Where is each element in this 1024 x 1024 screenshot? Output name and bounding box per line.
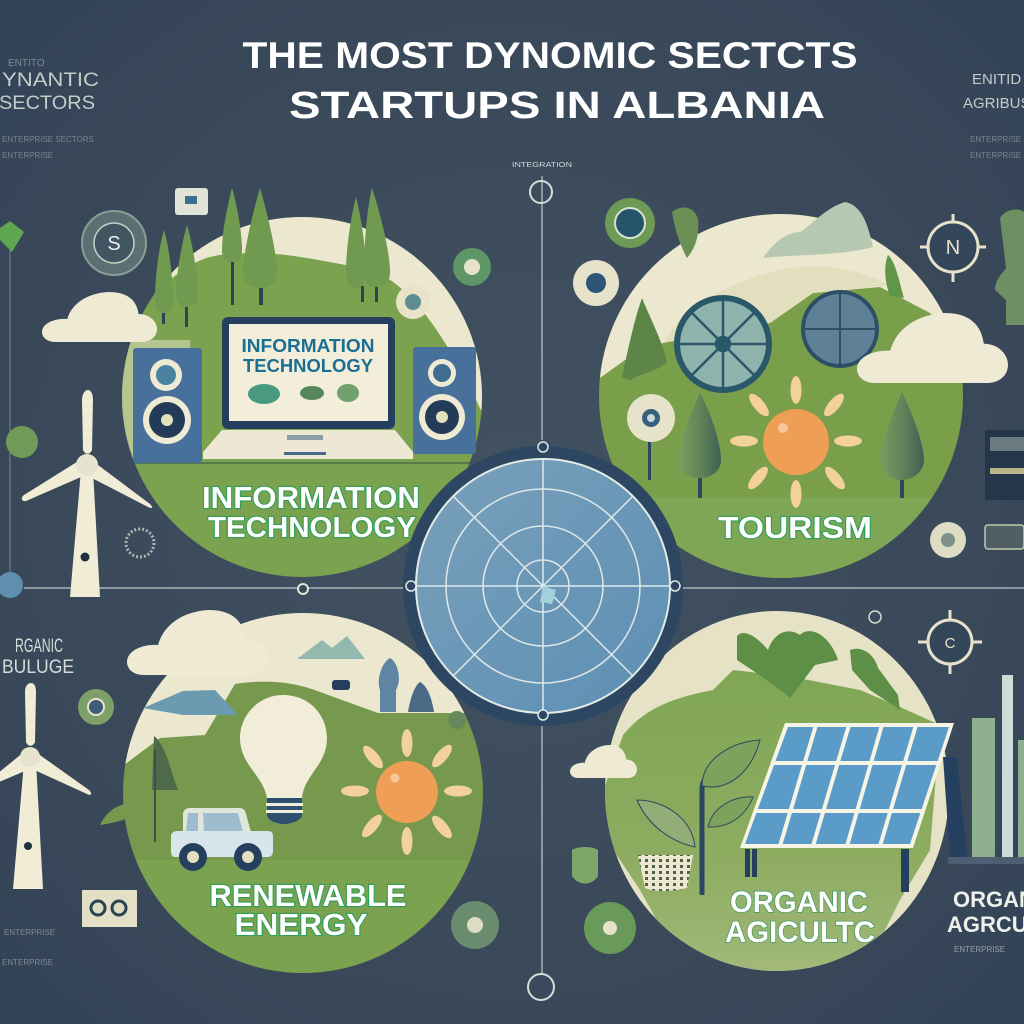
foliage xyxy=(737,631,900,710)
cloud xyxy=(570,745,637,778)
panel: organic agriculture xyxy=(570,611,967,980)
cloud xyxy=(42,292,157,342)
label xyxy=(725,886,875,949)
panel: renewable energy xyxy=(100,600,490,980)
radar chart xyxy=(403,442,683,726)
plant xyxy=(637,740,760,895)
right side label: ENTERPRISE xyxy=(970,151,1021,160)
cloud xyxy=(127,610,268,675)
label xyxy=(210,878,406,942)
laptop: TECHNOLOGY xyxy=(243,356,373,376)
trees xyxy=(679,392,924,498)
left side label: dynamic sectors: YNANTIC xyxy=(2,70,99,91)
wind turbine: upper xyxy=(22,390,152,597)
left side label: dynamic sectors xyxy=(0,58,99,160)
left side label: organic: RGANIC xyxy=(15,636,63,657)
left side label: organic xyxy=(2,636,74,967)
gear xyxy=(627,394,675,480)
bulb xyxy=(240,695,327,824)
label: INFORMATION xyxy=(202,480,420,515)
title: STARTUPS IN ALBANIA xyxy=(289,85,825,127)
label: ENERGY xyxy=(234,907,368,942)
panel: tourism xyxy=(590,200,1008,587)
wind turbine: lower xyxy=(0,683,91,889)
sun xyxy=(341,729,472,855)
right side label: organic agriculture xyxy=(947,887,1024,954)
label: AGICULTC xyxy=(725,916,875,949)
trees xyxy=(155,188,390,327)
sun xyxy=(730,376,862,508)
axis lines xyxy=(10,176,1024,975)
label: ORGANIC xyxy=(730,886,868,919)
title xyxy=(242,35,858,127)
wheel xyxy=(677,298,769,390)
laptop xyxy=(203,317,413,459)
label: TOURISM xyxy=(718,510,872,545)
mountain xyxy=(763,202,873,258)
right side label: ENTERPRISE xyxy=(970,135,1021,144)
solar panel xyxy=(740,723,967,892)
label xyxy=(202,480,420,544)
icon badges: S xyxy=(107,233,121,255)
hills and trees xyxy=(100,636,466,842)
car xyxy=(171,808,273,871)
label: RENEWABLE xyxy=(210,878,406,913)
left side label: organic: ENTERPRISE xyxy=(4,928,55,937)
panel: information technology xyxy=(42,188,490,577)
top axis label: INTEGRATION xyxy=(512,162,572,169)
left side label: organic: ENTERPRISE xyxy=(2,958,53,967)
tree left xyxy=(622,298,667,380)
bar graphic xyxy=(948,675,1024,864)
left side label: dynamic sectors: ENTITO xyxy=(8,58,45,69)
wheel xyxy=(803,292,877,366)
right side label: ENITID xyxy=(972,71,1021,88)
speaker left xyxy=(133,348,202,463)
left side label: dynamic sectors: ENTERPRISE SECTORS xyxy=(2,135,94,144)
left side label: dynamic sectors: SECTORS xyxy=(0,93,95,114)
title: THE MOST DYNOMIC SECTCTS xyxy=(242,35,858,76)
right side label: organic agriculture: ENTERPRISE xyxy=(954,945,1005,954)
left side label: organic: BULUGE xyxy=(2,657,74,678)
icon badges: C xyxy=(945,635,956,652)
icon badges: N xyxy=(946,237,960,259)
left side label: dynamic sectors: ENTERPRISE xyxy=(2,151,53,160)
laptop: INFORMATION xyxy=(242,336,374,356)
label: TECHNOLOGY xyxy=(208,512,416,544)
speaker right xyxy=(413,347,476,454)
cloud xyxy=(857,313,1008,383)
icon badges xyxy=(0,181,1024,1000)
right side label xyxy=(963,71,1024,160)
